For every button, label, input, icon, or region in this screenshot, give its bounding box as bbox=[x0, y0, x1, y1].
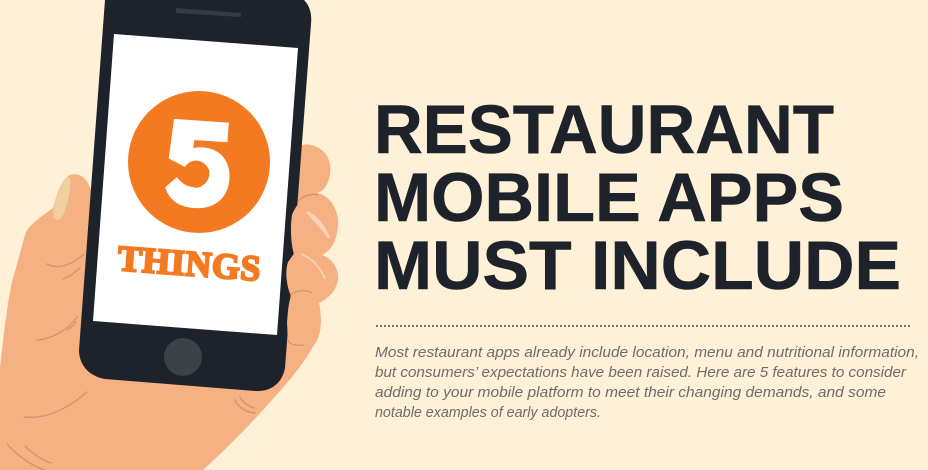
number 5: 5 bbox=[162, 99, 234, 230]
phone screen bbox=[93, 34, 298, 335]
orange circle bbox=[128, 91, 270, 233]
intro paragraph: notable examples of early adopters. bbox=[375, 405, 601, 421]
title: RESTAURANT bbox=[374, 91, 834, 168]
intro paragraph: but consumers’ expectations have been raised. Here are 5 features to consider bbox=[375, 365, 907, 381]
title: MUST INCLUDE bbox=[374, 227, 901, 304]
number 5 counter bbox=[148, 158, 209, 190]
phone body bbox=[79, 0, 311, 391]
title bbox=[374, 91, 901, 304]
phone speaker bbox=[176, 8, 241, 17]
title: MOBILE APPS bbox=[374, 159, 844, 236]
intro paragraph bbox=[375, 345, 919, 421]
intro paragraph: Most restaurant apps already include location, menu and nutritional information, bbox=[375, 345, 919, 361]
skin creases bbox=[7, 254, 255, 470]
THINGS label: THINGS bbox=[116, 238, 262, 289]
hand bbox=[0, 145, 330, 470]
intro paragraph: adding to your mobile platform to meet their changing demands, and some bbox=[375, 385, 886, 401]
thumb nail bbox=[53, 177, 71, 220]
fingers over phone bbox=[286, 193, 338, 345]
home button bbox=[164, 338, 202, 376]
illustration: hand holding phone bbox=[0, 0, 338, 470]
